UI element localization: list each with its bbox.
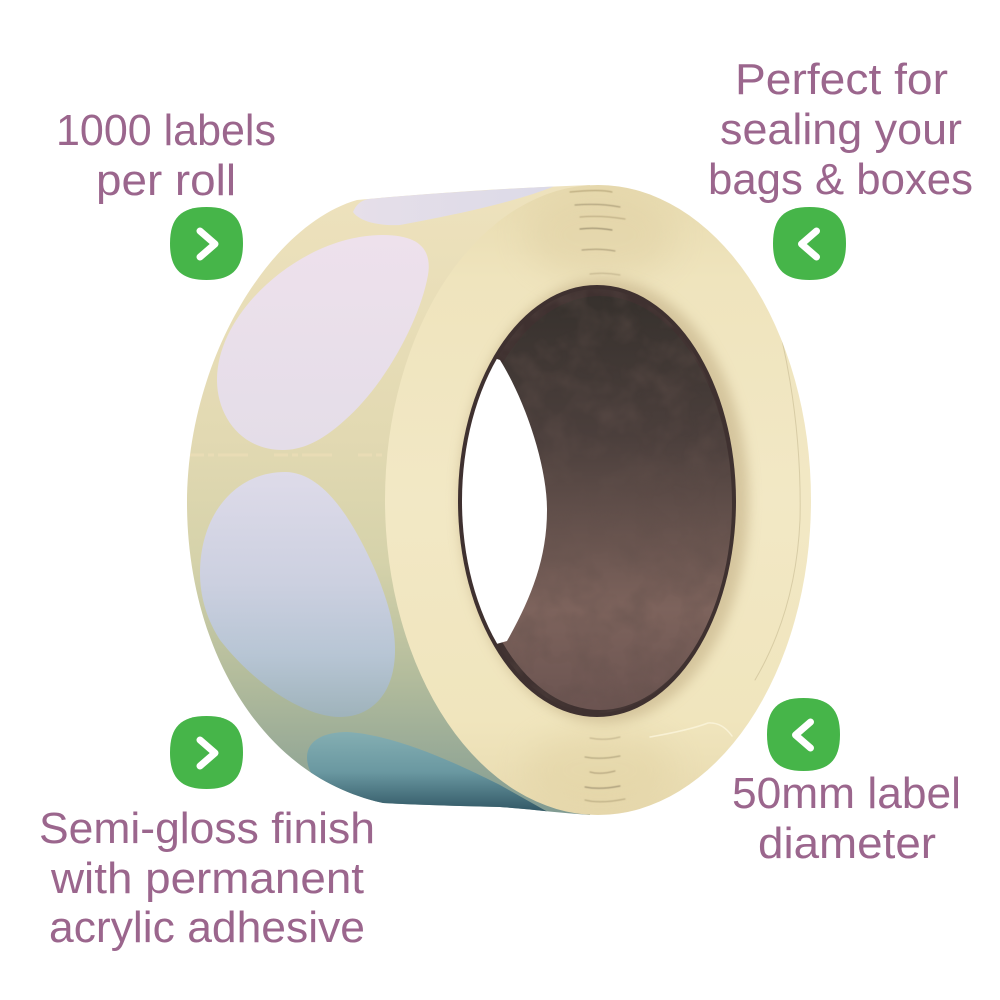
text: Semi-gloss finish: Semi-gloss finish xyxy=(39,804,375,853)
text: with permanent: with permanent xyxy=(50,854,364,903)
cardboard core xyxy=(440,285,740,717)
perforation line xyxy=(190,454,385,456)
text: acrylic adhesive: acrylic adhesive xyxy=(49,903,365,952)
text: diameter: diameter xyxy=(758,819,936,868)
text: 1000 labels: 1000 labels xyxy=(56,106,276,155)
text: bags & boxes: bags & boxes xyxy=(708,155,973,204)
product: label roll xyxy=(180,180,811,820)
core inner wall xyxy=(468,296,732,710)
see-through opening xyxy=(462,359,547,644)
icon: left chevron button xyxy=(767,698,840,771)
wound edge texture xyxy=(525,190,800,810)
icon: right chevron button xyxy=(170,716,243,789)
icon: right chevron button xyxy=(170,207,243,280)
text: Perfect for: Perfect for xyxy=(735,55,948,104)
label: partially visible top circle xyxy=(353,186,555,225)
icon: left chevron button xyxy=(773,207,846,280)
front face of roll xyxy=(385,185,811,815)
callout: 50mm label diameter xyxy=(732,698,961,868)
shadow around core xyxy=(459,279,749,723)
callout: perfect for sealing xyxy=(708,55,973,280)
text: per roll: per roll xyxy=(96,156,236,205)
callout: semi-gloss finish xyxy=(39,716,375,952)
roll side with label liner xyxy=(187,185,590,815)
label: pink circle xyxy=(217,235,429,450)
text: sealing your: sealing your xyxy=(720,105,962,154)
label: teal circle xyxy=(307,732,555,816)
callout: 1000 labels per roll xyxy=(56,106,276,280)
text: 50mm label: 50mm label xyxy=(732,769,961,818)
label: blue circle xyxy=(200,472,395,717)
